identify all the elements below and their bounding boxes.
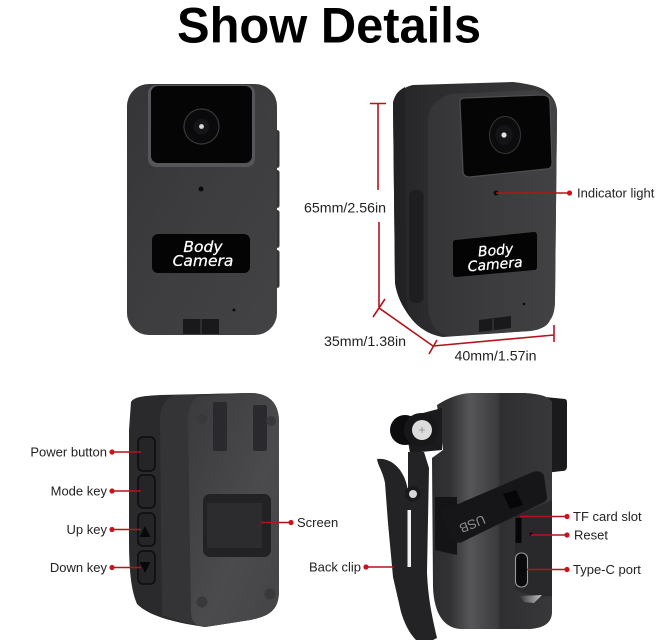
dimension: width: 40mm/1.57in — [454, 348, 537, 364]
callout: screen — [261, 515, 338, 530]
camera: front view — [127, 84, 280, 335]
bottom slot — [183, 319, 219, 334]
label: Body Camera — [453, 232, 537, 277]
callout: Type-C port — [527, 562, 641, 577]
dimension: width — [433, 325, 554, 364]
lens — [490, 116, 520, 154]
body — [127, 84, 277, 335]
callouts: buttons: Power button — [30, 444, 107, 460]
Type-C port — [516, 553, 528, 587]
callouts: buttons: Down key — [50, 560, 108, 575]
mic dot — [232, 308, 236, 312]
dimension: height — [304, 104, 386, 307]
label: Body Camera: Body — [183, 238, 223, 256]
camera: back view — [129, 393, 279, 627]
reset hole — [530, 532, 532, 536]
callout: indicator light: Indicator light — [577, 186, 655, 200]
down arrow — [140, 562, 150, 573]
dimension: depth — [324, 299, 437, 354]
callout: indicator light — [496, 186, 655, 200]
up arrow — [140, 526, 150, 537]
callout: reset: Reset — [574, 528, 608, 542]
clip mounts — [213, 402, 267, 451]
callouts: buttons: Mode key — [51, 484, 107, 498]
label: Body Camera: Body — [477, 241, 515, 261]
camera: side view with clip — [377, 393, 567, 640]
clip hinge — [390, 408, 442, 453]
indicator dot — [494, 191, 498, 195]
USB cover — [442, 471, 547, 543]
TF card slot — [516, 518, 522, 543]
label: Body Camera — [152, 234, 250, 273]
callout: TF card slot — [520, 509, 642, 524]
side body — [393, 82, 557, 337]
lens — [184, 109, 219, 144]
label: Body Camera: Camera — [173, 252, 233, 270]
callout: TF card slot: TF card slot — [573, 509, 642, 524]
light reflection — [520, 595, 542, 603]
side buttons — [138, 437, 155, 584]
callout: reset — [531, 528, 608, 542]
indicator dot — [198, 186, 204, 192]
side body — [432, 393, 552, 629]
callout: screen: Screen — [297, 515, 338, 530]
callout: Type-C port: Type-C port — [573, 562, 641, 577]
dark back band — [393, 87, 410, 317]
middle band — [160, 393, 250, 627]
side port cover — [409, 190, 424, 303]
callout: back clip: Back clip — [309, 560, 361, 574]
dimension: depth: 35mm/1.38in — [324, 334, 406, 350]
clip slit — [408, 510, 411, 567]
port panel — [515, 500, 552, 597]
front face — [428, 90, 557, 336]
lens block — [460, 95, 552, 177]
back face — [188, 393, 279, 627]
lens housing — [545, 397, 567, 473]
mic dot — [523, 303, 525, 305]
side body — [129, 393, 279, 627]
bottom slot — [479, 316, 511, 332]
clip recess — [435, 497, 457, 555]
USB cover: USB — [457, 512, 488, 536]
screen — [203, 494, 271, 557]
label: Body Camera: Camera — [467, 255, 523, 275]
screw holes — [196, 414, 276, 608]
dimension: height: 65mm/2.56in — [304, 200, 386, 216]
camera: angled view with dimensions — [393, 82, 557, 337]
clip pivot — [405, 486, 421, 502]
callout: back clip — [309, 560, 394, 574]
back clip — [377, 452, 437, 640]
side buttons — [274, 130, 280, 288]
callouts: buttons: Up key — [67, 522, 107, 537]
callouts: buttons — [30, 444, 141, 575]
lens block — [148, 85, 255, 167]
